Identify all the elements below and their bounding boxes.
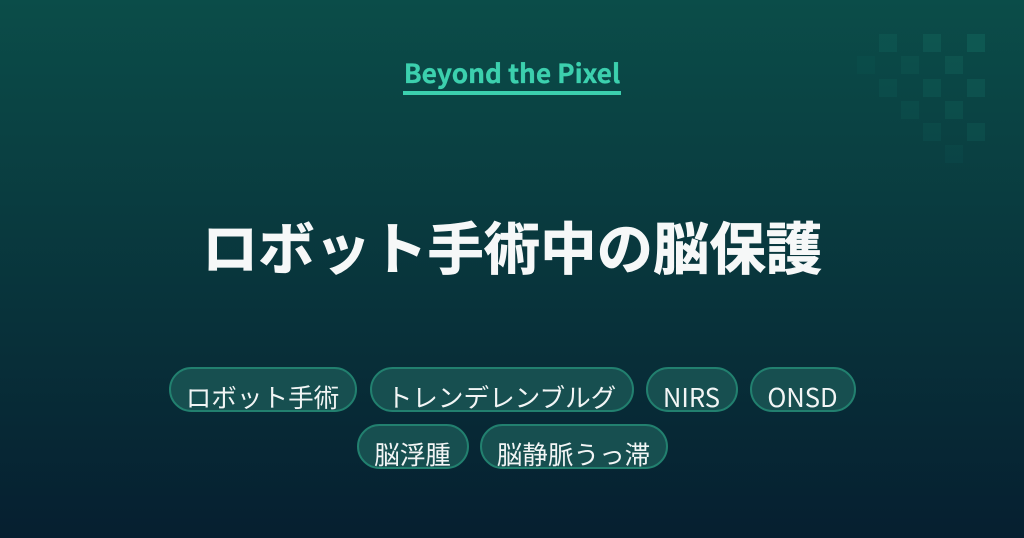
tag: Trendelenburg <box>370 367 634 412</box>
tag: brain edema: 脳浮腫 <box>374 435 451 472</box>
decorative pixel grid <box>879 34 985 141</box>
tag: brain edema <box>357 424 469 469</box>
tag: robot surgery: ロボット手術 <box>186 378 339 415</box>
tag: robot surgery <box>169 367 357 412</box>
brand underline <box>403 91 621 95</box>
tag: NIRS <box>646 367 738 412</box>
brand label: Beyond the Pixel <box>404 52 620 91</box>
tag: ONSD: ONSD <box>767 378 838 415</box>
title: ロボット手術中の脳保護 <box>202 205 822 286</box>
tag: NIRS: NIRS <box>663 378 720 415</box>
tag: cerebral venous congestion <box>480 424 668 469</box>
tag: cerebral venous congestion: 脳静脈うっ滞 <box>497 435 650 472</box>
tag: Trendelenburg: トレンデレンブルグ <box>387 378 616 415</box>
tag: ONSD <box>750 367 856 412</box>
